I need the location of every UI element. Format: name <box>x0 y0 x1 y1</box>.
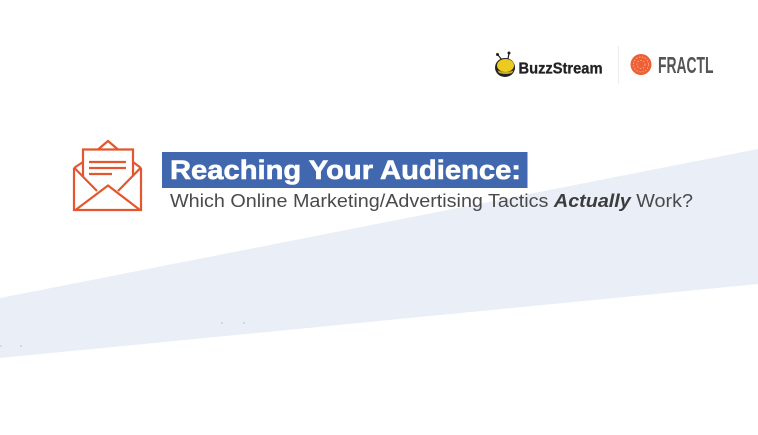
logo divider <box>618 46 620 84</box>
title text: Reaching Your Audience: <box>170 155 521 185</box>
wordmark: FRACTL: FRACTL <box>658 52 714 78</box>
icon: bee <box>495 52 515 77</box>
subtitle: Which Online Marketing/Advertising Tactics Actually Work? <box>170 191 693 211</box>
title background <box>162 152 528 188</box>
logo: BuzzStream <box>495 52 602 78</box>
icon: open envelope with letter <box>74 141 141 210</box>
icon: fractl orange wheel <box>630 54 652 75</box>
small specks on band <box>0 322 245 346</box>
background diagonal band <box>0 149 758 358</box>
title <box>162 152 528 188</box>
logo: Fractl <box>630 52 714 78</box>
wordmark: BuzzStream: BuzzStream <box>518 60 602 78</box>
